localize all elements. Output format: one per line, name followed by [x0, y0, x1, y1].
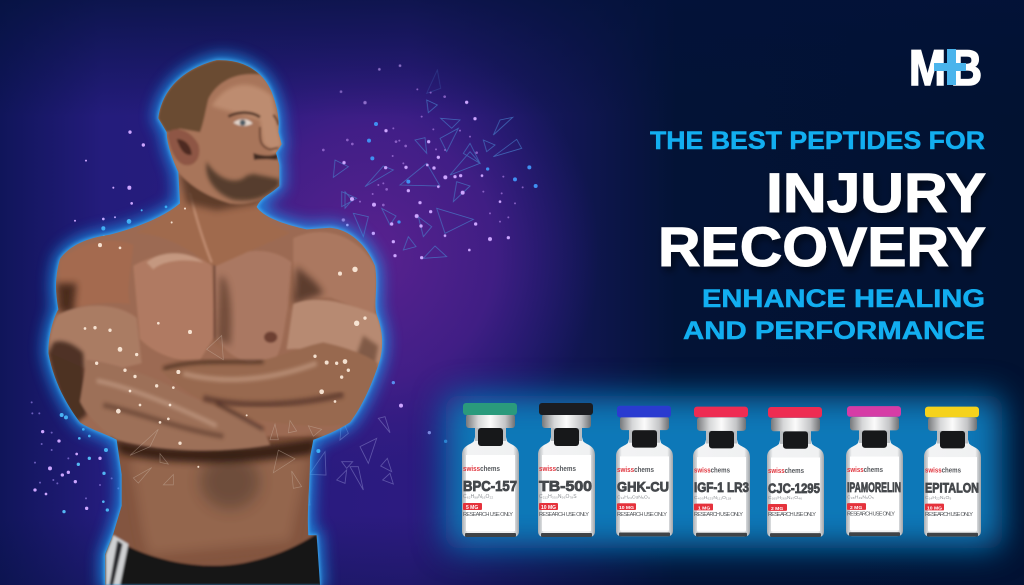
triangles over skin: [130, 335, 322, 488]
man figure: muscular man with folded arms: [30, 40, 400, 585]
wireframe triangles: [333, 70, 522, 258]
vial: Epitalon: C₁₄H₂₂N₄O₉: [925, 495, 951, 501]
body: [48, 60, 382, 585]
vial: IGF-1 LR3: IGF-1 LR3: [694, 480, 749, 496]
blue halo around figure: [48, 60, 382, 585]
ear: [167, 129, 199, 165]
vial: BPC-157: C₆₂H₉₈N₁₆O₂₂: [463, 494, 493, 500]
vial: Epitalon: 10 MG: [927, 506, 942, 511]
beard shadow: [206, 162, 279, 201]
torso lower: [111, 436, 322, 567]
shoulders: [73, 278, 82, 301]
logo: M+B: M: [909, 40, 946, 96]
particle cloud: upper right: [322, 64, 538, 259]
vial: BPC-157: 5 MG: [466, 505, 478, 511]
nipple: [264, 332, 277, 343]
left forearm crossing: [80, 360, 270, 450]
vial: GHK-CU: 10 MG: [619, 505, 634, 511]
vial: GHK-CU: C₁₄H₂₄CuN₆O₄: [617, 494, 650, 500]
vial: Ipamorelin: RESEARCH USE ONLY: [847, 511, 895, 517]
vial: Ipamorelin: IPAMORELIN: [847, 480, 901, 496]
particle cloud: lower right triangles: [300, 381, 447, 505]
vial: IGF-1 LR3: RESEARCH USE ONLY: [694, 512, 743, 518]
left forearm/bicep block: [50, 306, 142, 374]
vial: CJC-1295: 2 MG: [771, 506, 783, 512]
right pec: [215, 251, 292, 363]
vial: BPC-157: RESEARCH USE ONLY: [463, 512, 513, 518]
vial: BPC-157: [462, 403, 519, 537]
arm shadow under forearms: [113, 438, 317, 463]
right forearm crossing: [261, 342, 378, 373]
vial: Epitalon: EPITALON: [925, 481, 979, 496]
vial: GHK-CU: RESEARCH USE ONLY: [617, 512, 667, 518]
head: [173, 74, 279, 206]
vial: GHK-CU: GHK-CU: [617, 480, 669, 495]
heading: injury recovery: RECOVERY: [658, 215, 986, 278]
vial: CJC-1295: [767, 407, 824, 537]
vial: TB-500: swisschems: [539, 464, 576, 473]
subheading: enhance healing and performance: AND PERFORMANCE: [683, 317, 985, 345]
shorts: [105, 535, 320, 585]
vial panel glow: [446, 396, 1002, 548]
vial: Ipamorelin: 2 MG: [850, 505, 862, 511]
heading: injury recovery: [658, 161, 986, 278]
logo: M+B: [909, 40, 982, 96]
neck: [212, 251, 246, 266]
left pec: [133, 254, 215, 360]
vial: Ipamorelin: [846, 406, 903, 536]
hair: [158, 60, 260, 132]
vial: TB-500: 10 MG: [541, 505, 556, 511]
vial: Epitalon: RESEARCH USE ONLY: [925, 512, 973, 518]
particle cloud: lower left: [31, 401, 119, 513]
vial: BPC-157: swisschems: [463, 464, 500, 473]
subheading: enhance healing and performance: ENHANCE HEALING: [702, 285, 985, 313]
vial: Ipamorelin: swisschems: [847, 465, 883, 474]
vial: IGF-1 LR3: [693, 407, 750, 537]
vial: BPC-157: BPC-157: [463, 479, 517, 495]
vial: IGF-1 LR3: 1 MG: [698, 506, 710, 511]
subheading: enhance healing and performance: [683, 285, 985, 345]
vial: IGF-1 LR3: swisschems: [694, 466, 730, 475]
vial: TB-500: RESEARCH USE ONLY: [539, 512, 589, 518]
vial: TB-500: [538, 403, 595, 537]
heading: injury recovery: INJURY: [766, 161, 986, 224]
vial: Epitalon: swisschems: [925, 466, 961, 475]
logo: M+B: B: [951, 40, 982, 96]
blue dots: [367, 122, 538, 224]
purple dots: [340, 64, 510, 259]
nose shadow: [260, 127, 278, 149]
vial: TB-500: C₂₁₂H₃₅₀N₅₆O₇₈S: [539, 494, 577, 500]
sparkles on skin: [84, 208, 367, 468]
vial: Ipamorelin: C₃₈H₄₉N₉O₅: [847, 494, 874, 500]
dim dots: [322, 88, 524, 223]
vial: CJC-1295: RESEARCH USE ONLY: [768, 512, 816, 518]
vial: CJC-1295: swisschems: [768, 466, 804, 475]
eye: [233, 119, 253, 126]
vial: TB-500: TB-500: [539, 479, 592, 495]
vial: IGF-1 LR3: C₄₀₀H₆₂₅N₁₁₁O₁₁₈: [694, 495, 731, 501]
vial: Epitalon: [924, 407, 981, 537]
heading: the best peptides for: THE BEST PEPTIDES FOR: [650, 127, 985, 155]
particle cloud: upper left dots: [74, 130, 167, 238]
vial: GHK-CU: [616, 406, 673, 536]
vial: CJC-1295: CJC-1295: [768, 481, 820, 497]
vial: GHK-CU: swisschems: [617, 465, 654, 474]
right bicep: [287, 300, 382, 367]
vial: CJC-1295: C₁₆₅H₂₆₉N₄₇O₄₆: [768, 495, 802, 501]
